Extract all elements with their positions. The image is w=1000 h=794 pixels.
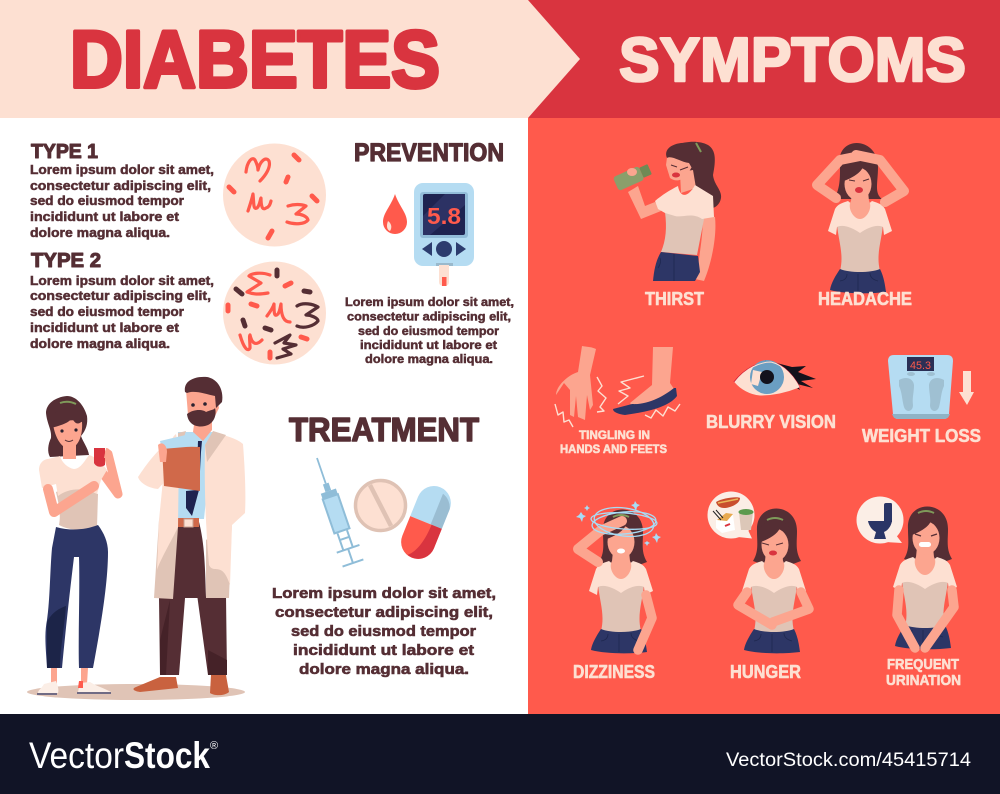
icon: glucose meter: 5.8 [427, 203, 461, 229]
icon: tablet [356, 480, 406, 530]
title: diabetes: DIABETES [70, 15, 440, 105]
symptom figure: frequent urination [893, 506, 957, 649]
text block: prevention: incididunt ut labore et [360, 338, 497, 352]
icon: syringe [306, 454, 364, 567]
icon: glucose meter [414, 183, 474, 286]
label: hunger: HUNGER [730, 662, 801, 682]
text block: type 2: sed do eiusmod tempor [30, 305, 184, 319]
label: tingling: TINGLING IN [579, 428, 650, 442]
footer logo [29, 735, 218, 776]
label: tingling: HANDS AND FEETS [560, 442, 667, 456]
footer url: VectorStock.com/45415714 [726, 750, 971, 771]
text block: treatment: Lorem ipsum dolor sit amet, [272, 585, 496, 602]
heading: type 2: TYPE 2 [31, 250, 101, 272]
heading: type 1: TYPE 1 [31, 141, 98, 163]
label: thirst: THIRST [645, 289, 704, 309]
header: diabetes banner [0, 0, 1000, 118]
panel: right symptoms [528, 118, 1000, 714]
icon: type 2 blood circle [223, 262, 326, 364]
icon: blood drop [383, 194, 407, 234]
label: blurry vision: BLURRY VISION [706, 412, 836, 432]
text block: prevention: dolore magna aliqua. [365, 352, 493, 366]
text block: prevention: Lorem ipsum dolor sit amet, [345, 295, 514, 309]
symptom figure: hunger [738, 508, 809, 653]
text block: type 2: consectetur adipiscing elit, [30, 289, 211, 303]
text block: type 2 [30, 274, 214, 351]
symptom figure: dizziness [576, 501, 661, 653]
character: woman patient [27, 396, 245, 700]
text block: type 1: Lorem ipsum dolor sit amet, [30, 163, 214, 177]
text block: treatment [272, 585, 496, 678]
text block: treatment: sed do eiusmod tempor [291, 623, 476, 640]
text block: treatment: dolore magna aliqua. [299, 661, 469, 678]
footer bar [0, 714, 1000, 794]
text block: prevention: consectetur adipiscing elit, [347, 310, 511, 324]
text block: treatment: consectetur adipiscing elit, [275, 604, 493, 621]
icon: food bubble [708, 492, 754, 538]
label: weight loss: WEIGHT LOSS [862, 426, 981, 446]
arrow: weight down [959, 371, 974, 405]
symptom figure: thirst [613, 142, 721, 281]
label: dizziness: DIZZINESS [573, 662, 655, 682]
text block: type 1: dolore magna aliqua. [30, 226, 170, 240]
label: frequent urination: URINATION [886, 672, 961, 689]
icon: toilet bubble [856, 496, 904, 544]
label: frequent urination [886, 656, 961, 689]
symptom figure: headache [817, 143, 904, 293]
text block: prevention: sed do eiusmod tempor [358, 324, 499, 338]
symptom figure: weight scale [888, 355, 953, 419]
text block: type 1 [30, 163, 214, 240]
icon: capsule [396, 481, 456, 564]
text block: type 2: dolore magna aliqua. [30, 337, 170, 351]
title: symptoms: SYMPTOMS [619, 26, 966, 95]
symptom figure: blurry eye [734, 360, 816, 395]
panel: left white [0, 118, 528, 714]
symptom figure: weight scale: 45.3 [910, 360, 931, 372]
footer logo: ® [210, 740, 218, 752]
text block: type 1: incididunt ut labore et [30, 210, 180, 224]
heading: prevention: PREVENTION [354, 139, 504, 167]
icon: type 1 blood circle [223, 144, 326, 246]
footer logo: Vector [29, 735, 124, 776]
heading: treatment: TREATMENT [289, 411, 479, 448]
text block: type 1: sed do eiusmod tempor [30, 194, 184, 208]
text block: type 2: Lorem ipsum dolor sit amet, [30, 274, 214, 288]
label: headache: HEADACHE [818, 289, 912, 309]
text block: type 1: consectetur adipiscing elit, [30, 179, 211, 193]
label: tingling [560, 428, 667, 456]
text block: type 2: incididunt ut labore et [30, 321, 180, 335]
label: frequent urination: FREQUENT [887, 656, 959, 673]
text block: treatment: incididunt ut labore et [293, 642, 474, 659]
symptom figure: tingling hand and foot [555, 346, 680, 427]
footer logo: Stock [124, 735, 210, 776]
character: doctor [133, 377, 245, 695]
text block: prevention [345, 295, 514, 366]
